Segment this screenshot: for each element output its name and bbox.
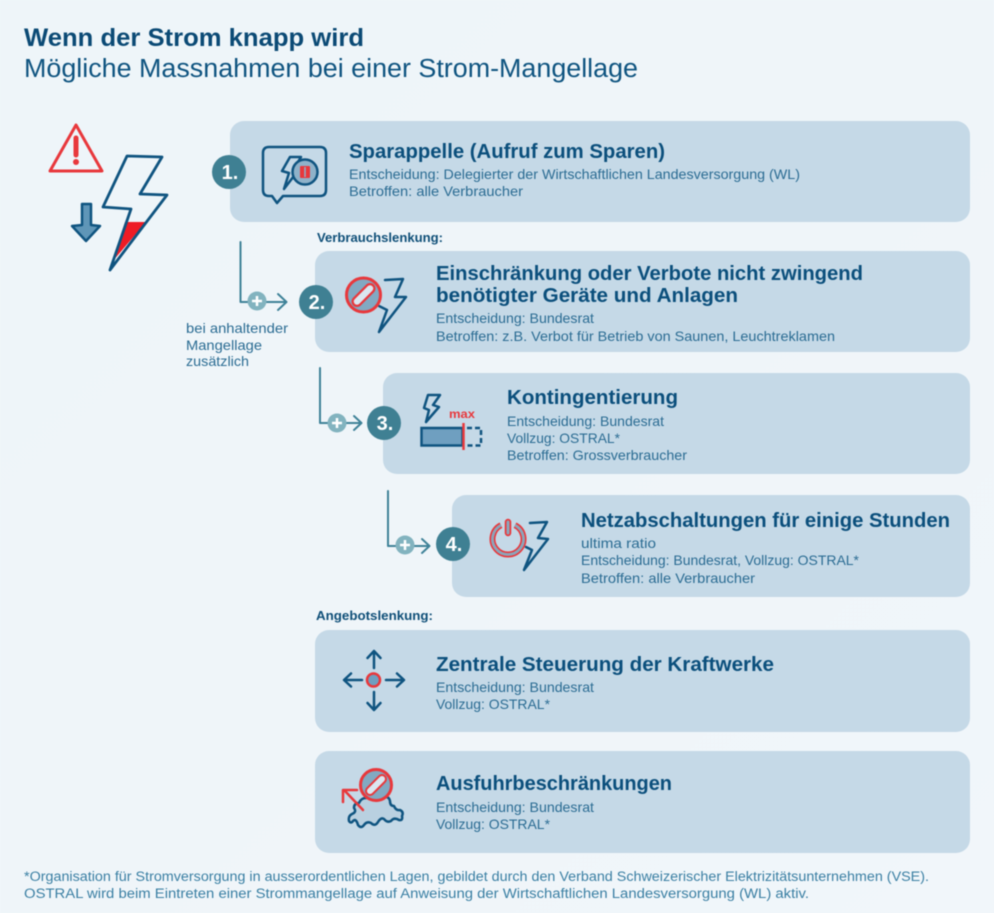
details: Vollzug: OSTRAL* bbox=[436, 816, 551, 832]
note: bei anhaltender Mangellage: zusätzlich bbox=[186, 353, 249, 369]
icon: speech bubble with bolt bbox=[263, 147, 326, 203]
details: Entscheidung: Bundesrat bbox=[507, 413, 664, 429]
details bbox=[436, 799, 594, 832]
icon: prohibition with bolt bbox=[346, 278, 406, 332]
heading: Sparappelle (Aufruf zum Sparen) bbox=[349, 140, 665, 163]
heading: Einschränkung oder Verbote nicht zwingend bbox=[436, 262, 863, 285]
connector to step 3 bbox=[320, 368, 362, 432]
icon: lightning bolt low bbox=[103, 156, 167, 270]
icon: down arrow bbox=[72, 204, 100, 241]
panel: Kontingentierung bbox=[367, 373, 970, 474]
details: Betroffen: alle Verbraucher bbox=[349, 183, 523, 199]
step number 4 bbox=[436, 527, 470, 561]
title: Mögliche Massnahmen bei einer Strom-Mangellage bbox=[24, 55, 638, 83]
step number 1: 1. bbox=[222, 162, 238, 184]
panel: Einschränkung oder Verbote bbox=[299, 251, 970, 352]
note: bei anhaltender Mangellage: Mangellage bbox=[186, 337, 262, 353]
step number 3 bbox=[367, 406, 401, 440]
footnote: OSTRAL wird beim Eintreten einer Strommangellage auf Anweisung der Wirtschaftlichen Landesversorgung (WL) aktiv. bbox=[24, 886, 809, 901]
step number 1 bbox=[212, 155, 246, 189]
connector to step 2 bbox=[240, 242, 286, 310]
panel: Sparappelle bbox=[212, 121, 970, 222]
details: Entscheidung: Bundesrat, Vollzug: OSTRAL* bbox=[581, 552, 860, 568]
footnote: *Organisation für Stromversorgung in ausserordentlichen Lagen, gebildet durch den Verband Schweizerischer Elektrizitätsunternehmen (VSE). bbox=[24, 869, 929, 884]
heading: benötigter Geräte und Anlagen bbox=[436, 284, 738, 307]
heading: Zentrale Steuerung der Kraftwerke bbox=[436, 653, 774, 676]
heading: Ausfuhrbeschränkungen bbox=[436, 772, 672, 795]
details: Betroffen: alle Verbraucher bbox=[581, 570, 755, 586]
details bbox=[507, 413, 687, 463]
heading: Kontingentierung bbox=[507, 386, 678, 409]
step number 3: 3. bbox=[377, 413, 393, 435]
details: Entscheidung: Bundesrat bbox=[436, 679, 594, 695]
details: ultima ratio bbox=[581, 535, 656, 551]
title bbox=[24, 24, 638, 83]
icon: max bar with bolt: max bbox=[449, 407, 475, 421]
details bbox=[436, 310, 835, 344]
details: Entscheidung: Delegierter der Wirtschaftlichen Landesversorgung (WL) bbox=[349, 166, 800, 182]
heading: Verbrauchslenkung: Verbrauchslenkung: bbox=[317, 230, 443, 245]
icon: power button with bolt bbox=[492, 522, 548, 570]
icon: warning triangle bbox=[50, 125, 102, 171]
details: Vollzug: OSTRAL* bbox=[436, 696, 551, 712]
heading: Angebotslenkung: Angebotslenkung: bbox=[316, 608, 433, 623]
details: Entscheidung: Bundesrat bbox=[436, 799, 594, 815]
details: Entscheidung: Bundesrat bbox=[436, 310, 594, 326]
step number 4: 4. bbox=[446, 534, 462, 556]
footnote bbox=[24, 869, 929, 901]
heading: Netzabschaltungen für einige Stunden bbox=[581, 509, 950, 532]
details bbox=[349, 166, 800, 199]
icon: Switzerland with prohibition and arrow bbox=[343, 770, 403, 827]
panel: Zentrale Steuerung bbox=[315, 630, 970, 732]
icon: max bar with bolt bbox=[422, 395, 481, 450]
note: bei anhaltender Mangellage: bei anhaltender bbox=[186, 320, 288, 336]
note: bei anhaltender Mangellage bbox=[186, 320, 288, 369]
step number 2 bbox=[299, 285, 333, 319]
title: Wenn der Strom knapp wird bbox=[24, 24, 364, 52]
connector to step 4 bbox=[388, 491, 430, 554]
icon: four arrows bbox=[344, 651, 404, 710]
panel: Ausfuhrbeschränkungen bbox=[315, 751, 970, 853]
details: Vollzug: OSTRAL* bbox=[507, 430, 621, 446]
details bbox=[581, 535, 860, 586]
details: Betroffen: z.B. Verbot für Betrieb von Saunen, Leuchtreklamen bbox=[436, 328, 835, 344]
details bbox=[436, 679, 594, 712]
details: Betroffen: Grossverbraucher bbox=[507, 447, 687, 463]
step number 2: 2. bbox=[309, 292, 325, 314]
panel: Netzabschaltungen bbox=[436, 495, 970, 597]
heading bbox=[436, 262, 863, 307]
